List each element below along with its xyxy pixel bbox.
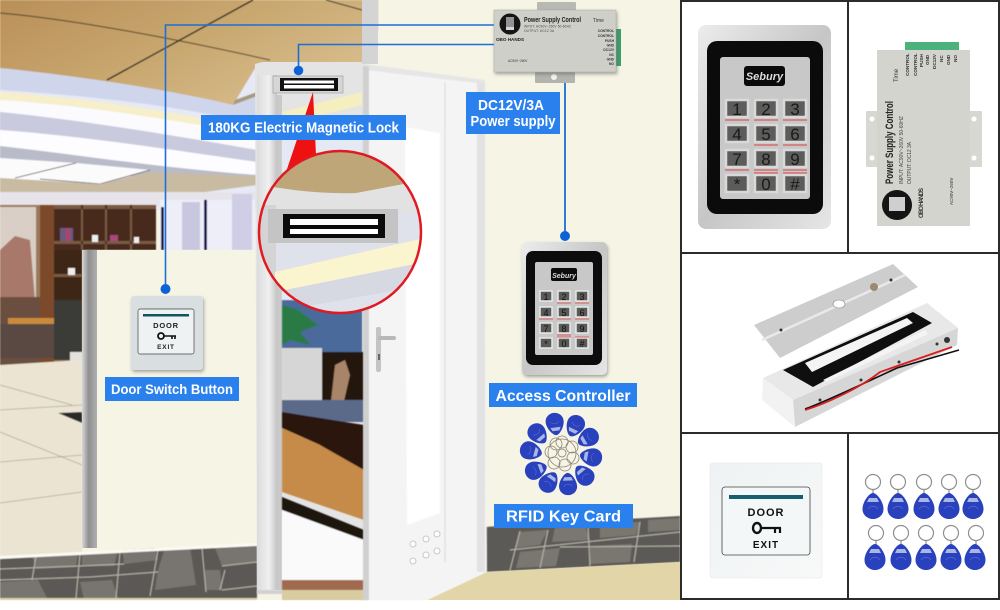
product: power supply: AC90V~260V (949, 178, 954, 205)
product: power supply: Power Supply Control (884, 101, 896, 184)
product: power supply: PUSH (919, 54, 924, 67)
door exit button on wall (131, 296, 203, 370)
label: door switch button: Door Switch Button (111, 381, 233, 397)
label: access controller (489, 383, 637, 407)
product: keypad: # (790, 175, 800, 194)
product: power supply: CONTROL (905, 53, 910, 76)
product: power supply: Time (894, 68, 900, 82)
panel: room scene (0, 0, 680, 600)
access controller keypad on wall: 0 (561, 339, 567, 349)
product: door exit button: DOOR (748, 507, 784, 519)
power supply unit: Power Supply Control (524, 15, 581, 24)
connector: exit button to power supply (160, 25, 494, 294)
power supply unit: DC12V (603, 48, 615, 52)
connector: power supply to keypad (560, 82, 570, 241)
background living room left (0, 194, 255, 557)
product: keypad: 2 (761, 100, 771, 119)
tiled floor (427, 562, 680, 600)
access controller keypad on wall: 6 (579, 308, 585, 318)
product: power supply: OUTPUT: DC12 3A (907, 141, 913, 184)
power supply unit: GND (607, 44, 615, 48)
product: keypad: 1 (732, 100, 742, 119)
magnetic lock on frame (273, 76, 343, 93)
door exit button on wall: DOOR (153, 321, 179, 330)
access controller keypad on wall: 3 (579, 292, 585, 302)
power supply unit (494, 2, 621, 83)
label: power supply: DC12V/3A (478, 97, 544, 114)
product grid (680, 0, 1000, 600)
power supply unit: INPUT: AC90V~260V 50-60HZ (524, 24, 571, 28)
access controller keypad on wall (522, 242, 607, 375)
label: access controller: Access Controller (496, 388, 630, 405)
power supply unit: PUSH (605, 39, 615, 43)
product: power supply (866, 42, 982, 226)
access controller keypad on wall: 5 (561, 308, 567, 318)
red callout pointer (285, 92, 316, 175)
stone skirting left (0, 543, 257, 600)
stone skirting right (484, 516, 680, 572)
product: keypad: 5 (761, 125, 771, 144)
door vent holes (410, 531, 440, 564)
label: power supply: Power supply (470, 113, 556, 130)
open door leaf (363, 64, 487, 600)
wall background (0, 0, 680, 600)
access controller keypad on wall: 2 (561, 292, 567, 302)
magnified lock circle (255, 150, 425, 320)
door exit button on wall: EXIT (157, 344, 175, 351)
product: door exit button (710, 463, 822, 578)
power supply unit: AC90V~260V (508, 59, 528, 63)
power supply unit: GND (607, 58, 615, 62)
connector: magnetic lock to power supply (294, 44, 495, 75)
access controller keypad on wall: * (544, 339, 548, 349)
product: power supply: INPUT: AC90V~260V 50-60HZ (899, 116, 905, 184)
power supply unit: OUTPUT: DC12 3A (524, 29, 555, 33)
power supply unit: CONTROL (598, 34, 614, 38)
power supply unit: Time (593, 18, 604, 24)
product: keypad: Sebury (746, 71, 784, 83)
label: magnetic lock: 180KG Electric Magnetic Lock (208, 120, 400, 136)
grid lines (680, 0, 1000, 600)
product: power supply: GND (946, 54, 951, 65)
product: keypad: 4 (732, 125, 742, 144)
product: keypad: 3 (790, 100, 800, 119)
grey partition column (82, 250, 97, 548)
access controller keypad on wall: 9 (579, 324, 585, 334)
power supply unit: OBO HANDS (496, 37, 524, 42)
product: keypad: 8 (761, 150, 771, 169)
cream partition wall (97, 250, 257, 547)
product: RFID key fobs (862, 474, 986, 570)
access controller keypad on wall: Sebury (552, 273, 577, 280)
product: power supply: DC12V (932, 53, 937, 69)
power supply unit: CONTROL (598, 29, 614, 33)
product: power supply: OBO HANDS (919, 188, 925, 218)
product: power supply: NC (939, 55, 944, 62)
product: keypad: * (734, 175, 741, 194)
product: keypad: 9 (790, 150, 800, 169)
door window (405, 127, 440, 525)
door handle (376, 327, 396, 372)
access controller keypad on wall: # (579, 339, 585, 349)
product: power supply: NO (953, 55, 958, 62)
product: keypad: 0 (761, 175, 771, 194)
panel backgrounds (680, 0, 1000, 600)
access controller keypad on wall: 4 (543, 308, 549, 318)
power supply unit: NO (609, 62, 614, 66)
ceiling and lighting bands (0, 0, 378, 210)
product: power supply: GND (925, 54, 930, 65)
label: RFID key card (494, 504, 633, 528)
label: RFID key card: RFID Key Card (506, 508, 621, 526)
product: magnetic lock (754, 264, 959, 427)
product: keypad: 7 (732, 150, 742, 169)
product: door exit button: EXIT (753, 540, 779, 551)
label: door switch button (105, 377, 239, 401)
RFID key fobs arranged in circle (518, 412, 604, 496)
power supply unit: NC (609, 53, 615, 57)
door frame (255, 0, 378, 600)
access controller keypad on wall: 8 (561, 324, 567, 334)
label: power supply (466, 92, 560, 134)
product: power supply: CONTROL (913, 53, 918, 76)
view through door opening (257, 92, 367, 600)
access controller keypad on wall: 1 (543, 292, 549, 302)
product: keypad: 6 (790, 125, 800, 144)
label: magnetic lock (201, 115, 406, 140)
access controller keypad on wall: 7 (543, 324, 549, 334)
product: keypad (698, 25, 831, 229)
